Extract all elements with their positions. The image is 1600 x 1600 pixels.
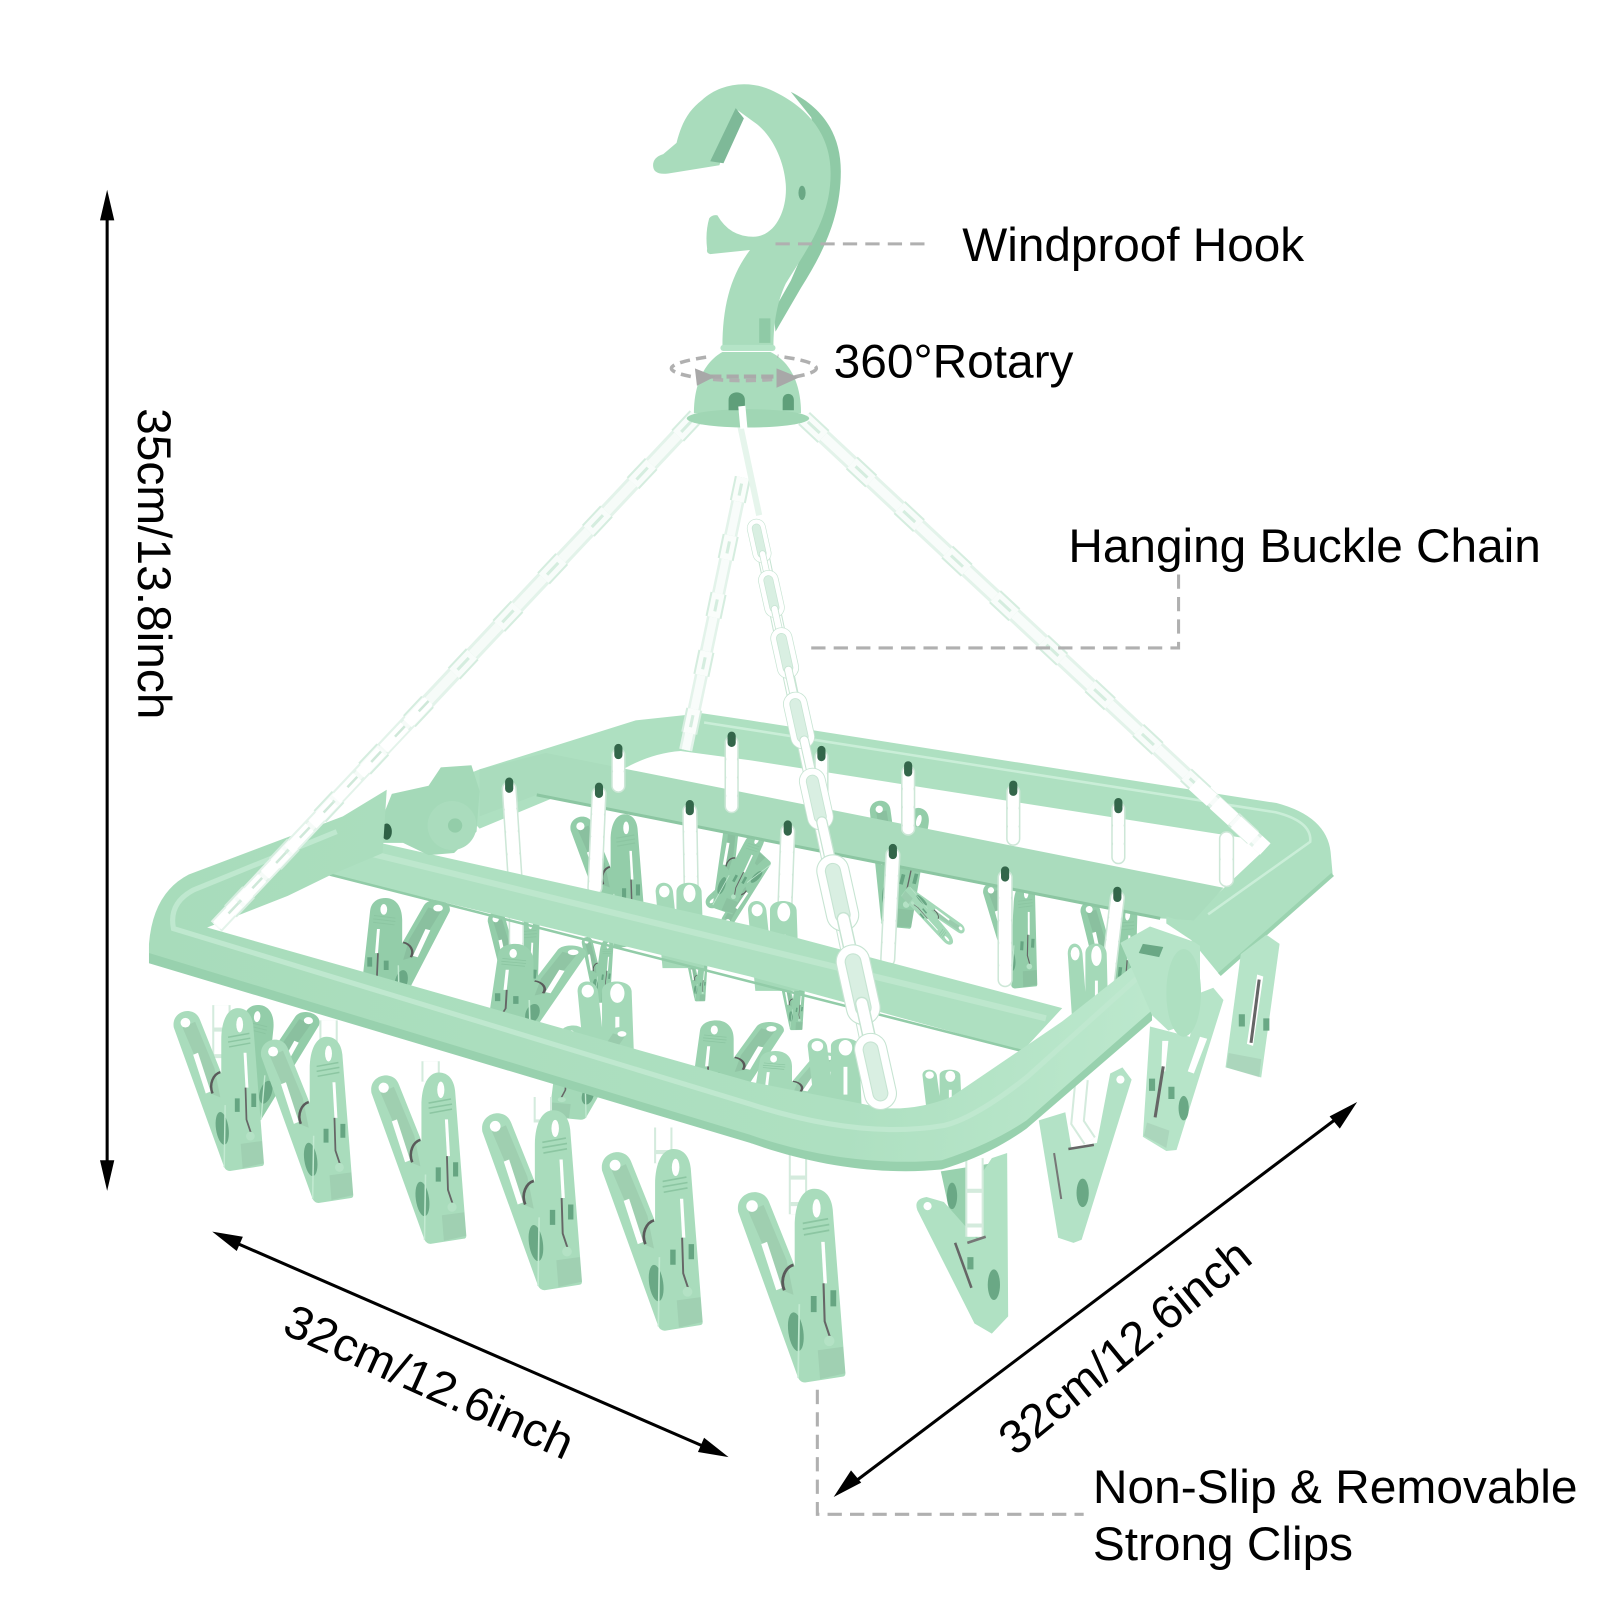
arrow heads — [695, 368, 799, 388]
hook pin — [798, 186, 806, 200]
label: windproof hook: Windproof Hook — [962, 219, 1305, 271]
dimension arrow: height — [100, 190, 114, 1191]
middle clips — [360, 876, 1109, 1042]
back frame — [439, 713, 1333, 974]
label: clips line 2: Strong Clips — [1093, 1518, 1353, 1570]
dome — [694, 352, 801, 413]
centre link — [742, 406, 744, 429]
clip 10 — [1226, 935, 1280, 1078]
flange — [687, 409, 809, 428]
hinge tab — [1166, 916, 1216, 949]
middle rail — [480, 753, 1223, 920]
neck collar — [720, 345, 776, 351]
front row clips — [174, 935, 1280, 1382]
label: clips line 1: Non-Slip & Removable — [1093, 1461, 1578, 1513]
hook inner recess — [710, 108, 744, 163]
dashed ring — [671, 356, 816, 381]
hinge plate — [380, 765, 480, 855]
label: rotary: 360°Rotary — [834, 336, 1074, 388]
rotation indicator — [671, 356, 816, 388]
hook front plate — [653, 84, 831, 347]
label: height: 35cm/13.8inch — [128, 408, 180, 719]
rack assembly — [149, 84, 1333, 1382]
hinge disc — [1166, 949, 1201, 1037]
block socket — [1139, 944, 1163, 957]
front frame — [149, 790, 1163, 1171]
back row clips — [223, 796, 1146, 1127]
frame highlight — [173, 832, 1138, 1129]
chain: left — [216, 416, 696, 927]
hinge pin — [448, 818, 462, 833]
swivel base — [687, 352, 809, 429]
clip 9 — [1143, 988, 1223, 1151]
back frame highlight — [704, 722, 1310, 914]
hinge disc — [428, 801, 477, 850]
clip 8 — [1039, 1067, 1132, 1243]
dimension arrow: depth — [834, 1102, 1357, 1497]
slots — [729, 392, 794, 410]
neck window — [759, 318, 770, 343]
back frame lip — [1219, 874, 1333, 974]
back frame with rails — [439, 713, 1333, 974]
hook — [653, 84, 841, 351]
label: depth: 32cm/12.6inch — [989, 1229, 1261, 1465]
chain: back — [686, 478, 743, 750]
chain: right — [804, 418, 1265, 849]
dimension arrow: width — [212, 1232, 729, 1457]
clip 7 — [916, 1153, 1008, 1334]
hanging chains — [216, 416, 1265, 1107]
frame tube — [149, 790, 1163, 1162]
leader lines — [776, 244, 1179, 1514]
middle rail underside — [537, 795, 1160, 918]
lower clips seen through frame — [549, 981, 962, 1128]
front row links — [221, 1005, 798, 1214]
left hinge — [380, 765, 480, 855]
front rail underside — [330, 874, 1022, 1051]
frame shadow lip — [149, 947, 1152, 1171]
label: width: 32cm/12.6inch — [277, 1294, 582, 1469]
hinge fill — [1120, 927, 1200, 1031]
arrow line — [709, 375, 791, 379]
rail holes with hanging links — [247, 736, 1227, 995]
front rail highlight — [352, 849, 1046, 1018]
hinge hole — [382, 823, 392, 840]
hook back plate — [773, 92, 841, 332]
front rail — [306, 832, 1062, 1051]
chain: front — [740, 423, 894, 1107]
right hinge — [1120, 916, 1216, 1037]
front rail body — [306, 832, 1062, 1051]
label: chain: Hanging Buckle Chain — [1068, 520, 1541, 572]
